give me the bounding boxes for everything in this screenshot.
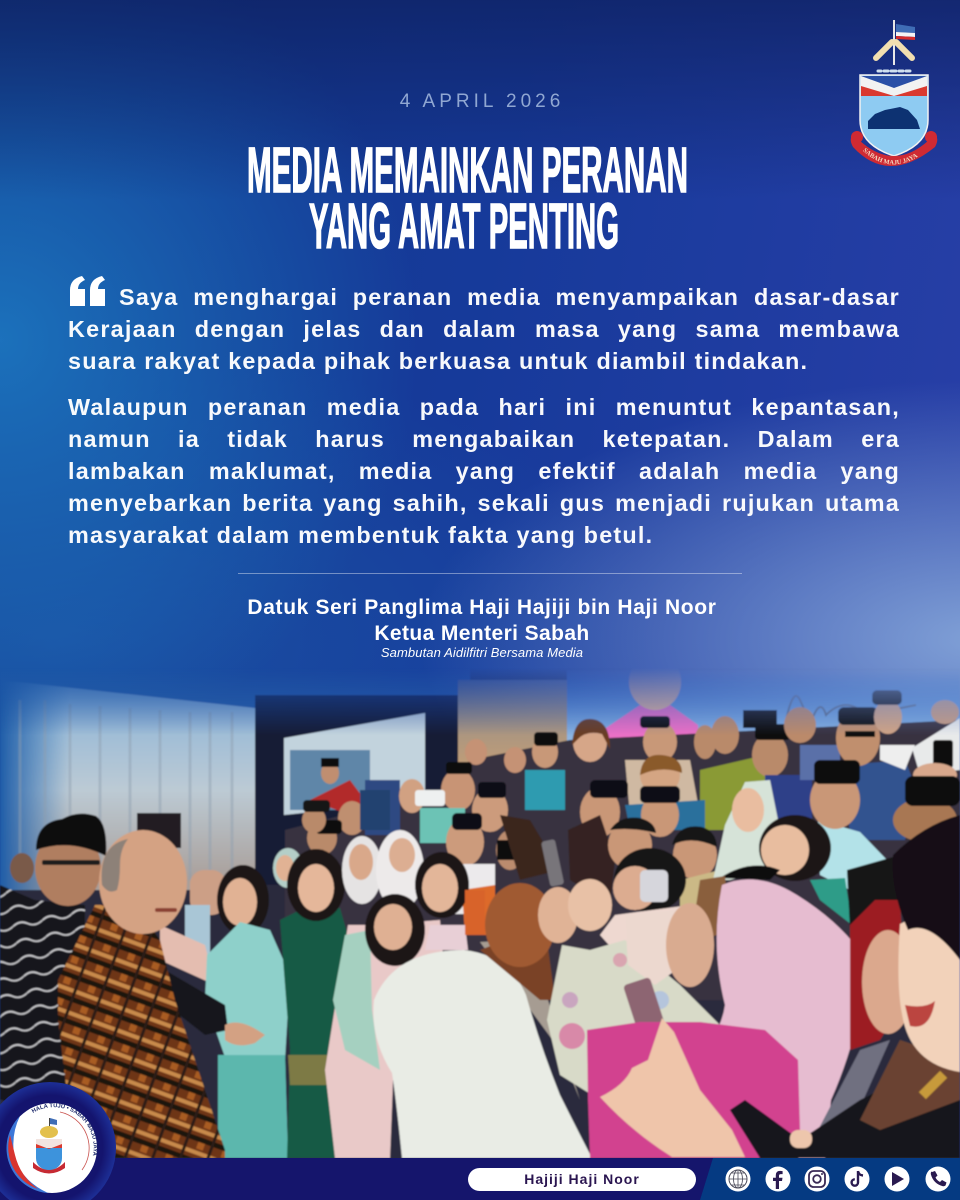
headline (247, 134, 688, 262)
quote: second paragraph: masyarakat dalam membentuk fakta yang betul. (68, 522, 653, 548)
foreground: hand with ring (600, 1018, 745, 1157)
name pill (468, 1168, 696, 1191)
Chief Minister in batik shirt (58, 830, 265, 1158)
quote: first paragraph: Kerajaan dengan jelas dan dalam masa yang sama membawa (68, 316, 900, 342)
foreground: woman laughing at right (730, 815, 960, 1158)
foreground: magenta scarf (587, 1022, 800, 1158)
man in black songkok and striped shirt (0, 814, 106, 1110)
event photograph: crowd with the Chief Minister (0, 654, 960, 1173)
quote: first paragraph (68, 284, 900, 374)
social icons (726, 1166, 950, 1192)
blue social strip (700, 1158, 960, 1200)
attribution: Ketua Menteri Sabah (374, 622, 590, 645)
attribution (247, 596, 717, 660)
bottom bar (0, 1158, 960, 1200)
attribution: Datuk Seri Panglima Haji Hajiji bin Haji Noor (247, 596, 717, 619)
attribution: Sambutan Aidilfitri Bersama Media (381, 645, 583, 660)
back rows of the crowd (285, 690, 960, 1000)
circular Hala Tuju logo (0, 1082, 116, 1200)
quote: second paragraph: menyebarkan berita yang sahih, sekali gus menjadi rujukan utama (68, 490, 900, 516)
motto ribbon (850, 131, 938, 166)
foreground: woman with orange hair holding phone (465, 839, 612, 967)
arms holding pole (876, 42, 912, 58)
crest of Sabah (850, 20, 938, 166)
hijab and hair figures at upper right (599, 759, 960, 946)
photo backdrop: curtains, screen and banner (0, 654, 960, 1160)
name pill: Hajiji Haji Noor (524, 1171, 640, 1187)
icon: phone (926, 1166, 950, 1192)
quote: second paragraph (68, 394, 900, 548)
quote: second paragraph: lambakan maklumat, media yang efektif adalah media yang (68, 458, 900, 484)
flagpole and flag (893, 20, 915, 65)
middle rows of men in songkok (302, 762, 720, 935)
motto ribbon: SABAH MAJU JAYA (863, 148, 918, 164)
row of women in baju kurung (160, 830, 469, 1158)
quote: first paragraph: Saya menghargai peranan media menyampaikan dasar-dasar (119, 284, 900, 310)
quote: second paragraph: Walaupun peranan media pada hari ini menuntut kepantasan, (68, 394, 900, 420)
date: 4 APRIL 2026 (400, 91, 564, 112)
foreground: white hijab (373, 925, 592, 1158)
quote: first paragraph: suara rakyat kepada pihak berkuasa untuk diambil tindakan. (68, 348, 808, 374)
icon: website globe (726, 1166, 750, 1192)
quote: second paragraph: namun ia tidak harus mengabaikan ketepatan. Dalam era (68, 426, 900, 452)
row of pearls (878, 70, 910, 72)
logo ring text: HALA TUJU • SABAH MAJU JAYA (31, 1103, 98, 1156)
icon: facebook (766, 1166, 790, 1192)
icon: youtube play (884, 1166, 910, 1192)
icon: opening quotation mark (70, 276, 105, 306)
icon: instagram (804, 1166, 830, 1192)
icon: tiktok (844, 1166, 870, 1192)
small crest (33, 1118, 65, 1174)
foreground: pink hijab (666, 879, 861, 1173)
foreground: floral sleeve (546, 940, 720, 1094)
shield (860, 75, 928, 156)
